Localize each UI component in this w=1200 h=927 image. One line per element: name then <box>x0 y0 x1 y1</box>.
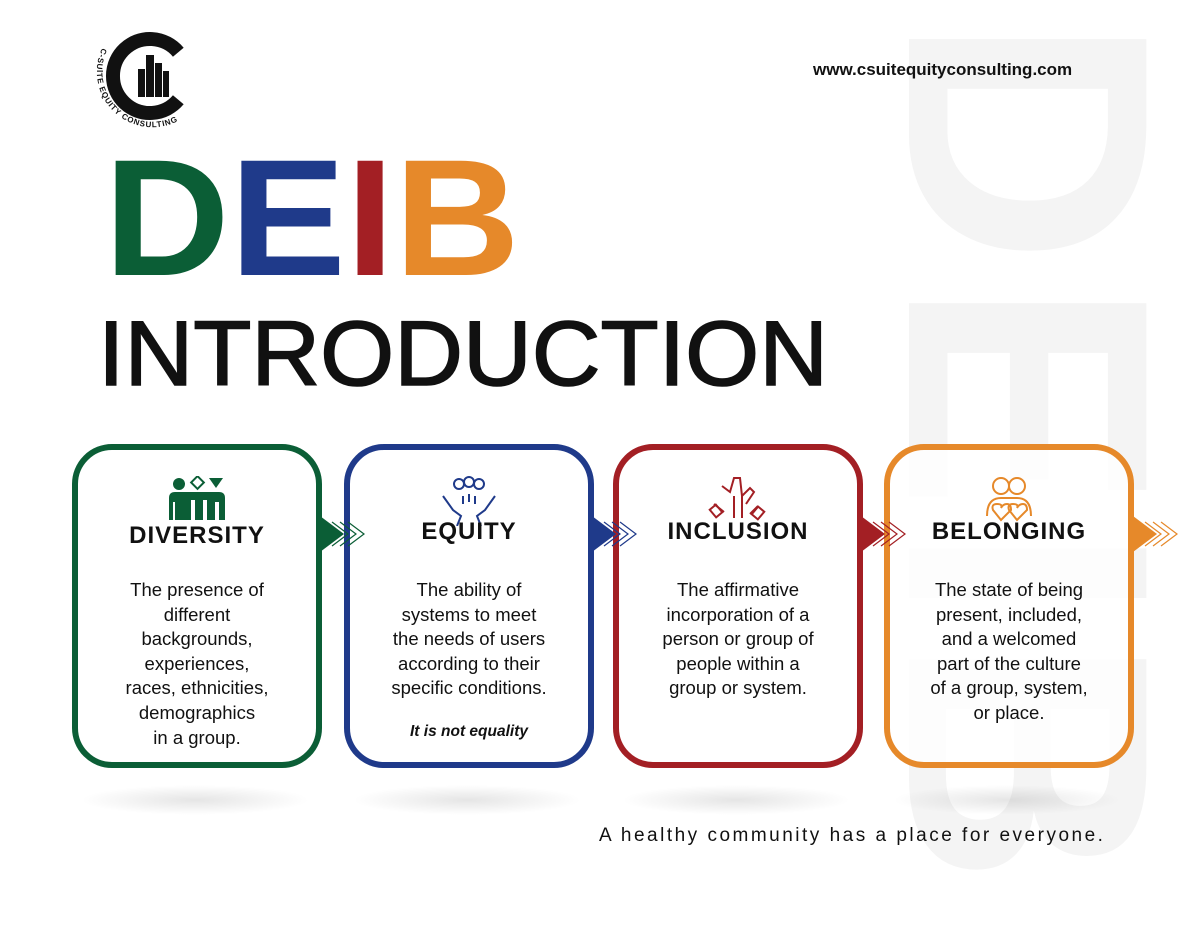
logo: C-SUITE EQUITY CONSULTING <box>96 48 177 128</box>
panel: diversity: experiences, <box>145 653 249 674</box>
website url: www.csuitequityconsulting.com <box>813 60 1072 79</box>
panel: belonging <box>884 444 1134 768</box>
icon: high five hands <box>708 477 766 521</box>
panel: equity: The ability of <box>417 579 521 600</box>
panel: belonging: of a group, system, <box>930 677 1088 698</box>
panel: equity: the needs of users <box>393 628 545 649</box>
tagline: A healthy community has a place for everyone. <box>599 825 1105 846</box>
panel: diversity: DIVERSITY <box>129 522 265 549</box>
panel: belonging: BELONGING <box>932 518 1086 545</box>
panel: belonging: or place. <box>974 702 1044 723</box>
arrow: inclusion to belonging <box>863 518 906 550</box>
panel: equity <box>344 444 594 768</box>
panel: equity: It is not equality <box>410 723 528 740</box>
panel: inclusion <box>613 444 863 768</box>
panel: diversity: different <box>164 604 230 625</box>
panel: inclusion: INCLUSION <box>668 518 808 545</box>
card shadows <box>118 790 1084 810</box>
arrow: equity to inclusion <box>594 518 637 550</box>
panel: belonging: present, included, <box>936 604 1082 625</box>
panel: diversity: demographics <box>139 702 255 723</box>
panel: inclusion: person or group of <box>662 628 814 649</box>
panel: diversity <box>72 444 322 768</box>
panel: belonging: part of the culture <box>937 653 1081 674</box>
icon: people with hearts <box>986 477 1032 522</box>
panel: inclusion: people within a <box>676 653 800 674</box>
panel: diversity: in a group. <box>153 727 241 748</box>
panel: belonging: The state of being <box>935 579 1083 600</box>
arrow: diversity to equity <box>322 518 365 550</box>
panel: diversity: backgrounds, <box>141 628 253 649</box>
panel: belonging: and a welcomed <box>942 628 1076 649</box>
panel: equity: EQUITY <box>421 518 517 545</box>
arrow: belonging out <box>1134 516 1178 552</box>
panel: inclusion: The affirmative <box>677 579 799 600</box>
panel: inclusion: incorporation of a <box>667 604 809 625</box>
panel: equity: specific conditions. <box>391 677 547 698</box>
panel: equity: systems to meet <box>402 604 536 625</box>
panel: diversity: races, ethnicities, <box>126 677 268 698</box>
icon: hands with people <box>442 476 496 526</box>
panel: diversity: The presence of <box>130 579 264 600</box>
icon: people <box>169 476 225 520</box>
panel: equity: according to their <box>398 653 540 674</box>
panel: inclusion: group or system. <box>669 677 807 698</box>
